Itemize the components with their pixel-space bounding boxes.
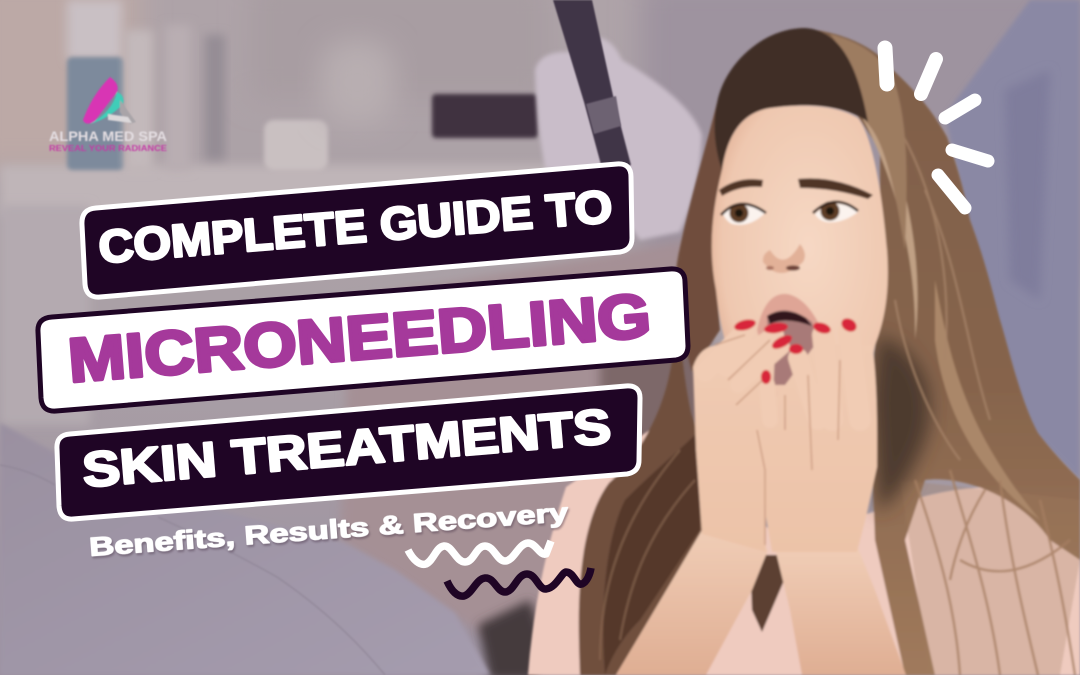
forearms: [616, 530, 768, 675]
banner: complete guide to: COMPLETE GUIDE TO: [97, 180, 614, 273]
jar: [264, 120, 328, 170]
logo name: ALPHA MED SPA: [49, 128, 167, 144]
dark hair top: [715, 28, 868, 170]
subtitle: Benefits, Results & Recovery: [88, 497, 570, 562]
nose: [763, 244, 805, 273]
face: [712, 106, 888, 420]
banner: skin treatments: [57, 386, 640, 519]
wave squiggle: white: [408, 541, 551, 564]
wave squiggle: dark: [447, 568, 591, 596]
left hair: [579, 247, 720, 675]
patient skin: [340, 240, 700, 660]
neck shadow and v-neck: [750, 555, 795, 632]
logo mark: [83, 77, 136, 124]
hands: [693, 332, 877, 552]
banner: microneedling: [38, 269, 688, 411]
eyes: [721, 202, 858, 225]
hair wisps over shirt: [915, 470, 1075, 675]
patient bed: [0, 423, 490, 675]
banner: microneedling: MICRONEEDLING: [66, 281, 653, 396]
shirt: [528, 423, 1080, 675]
eyebrows: [719, 179, 763, 196]
bottle: [67, 0, 122, 60]
neck-side hair shadow: [872, 335, 930, 512]
banner: skin treatments: SKIN TREATMENTS: [80, 400, 613, 498]
hair veil over shirt: [900, 480, 1080, 675]
mouth: [757, 294, 826, 385]
left temple hair: [678, 103, 722, 372]
lighter hair sweep: [830, 34, 907, 250]
right hair: [800, 28, 1080, 675]
logo: [49, 77, 168, 153]
fingers: [705, 332, 860, 420]
logo tagline: REVEAL YOUR RADIANCE: [49, 144, 168, 153]
finger seams: [715, 335, 840, 545]
red nails: [733, 316, 859, 384]
dark tray: [432, 94, 538, 138]
banner: complete guide to: [82, 164, 632, 297]
assistant clothing right: [945, 0, 1080, 480]
glove and microneedling pen: [535, 0, 702, 240]
spark lines: [885, 48, 988, 208]
woman: [528, 28, 1080, 675]
background right wall: [640, 0, 1080, 280]
